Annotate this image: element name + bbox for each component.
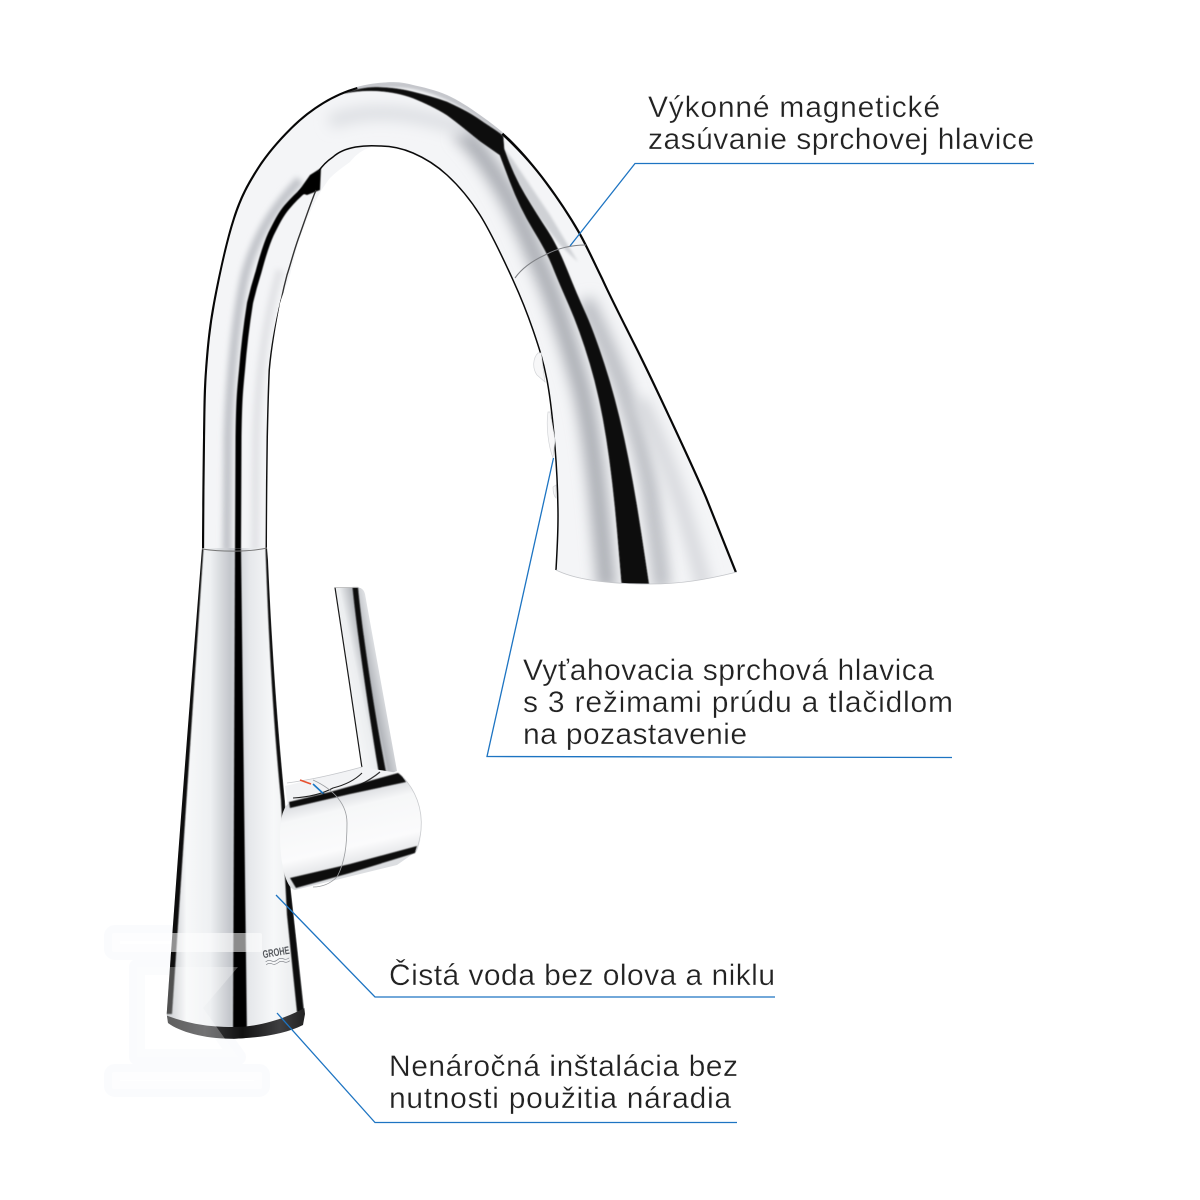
right dark edge: [266, 548, 304, 1012]
callout text: Nenáročná inštalácia bez: [389, 1050, 738, 1083]
sliver next to the black stripe: [503, 148, 578, 262]
watermark: [112, 933, 262, 1089]
head bottom edge: [556, 570, 737, 584]
callout text: zasúvanie sprchovej hlavice: [648, 123, 1034, 156]
callout text: nutnosti použitia náradia: [389, 1082, 731, 1115]
grey lip at top: [345, 84, 503, 134]
logo: GROHE: GROHE: [262, 945, 291, 961]
handle base plate: [285, 767, 398, 808]
callout: magnetic docking: [570, 91, 1034, 246]
black reflection band on the tube: [238, 190, 304, 552]
outer edge: [202, 87, 357, 552]
callout: clean water: [276, 895, 775, 997]
leader line: [570, 164, 1034, 246]
faucet: [160, 82, 737, 1045]
black base ring: [166, 1008, 305, 1039]
black top band and head stripe: [345, 87, 649, 586]
left dark edge: [165, 548, 204, 1014]
thin inner dark line of the tube: [277, 190, 316, 325]
blue temperature mark: [313, 784, 327, 797]
spray buttons: [534, 353, 556, 498]
leader line: [277, 1013, 737, 1122]
watermark halo: [112, 933, 262, 1089]
center black stripe: [233, 548, 247, 1040]
red temperature mark: [300, 780, 311, 784]
mixer cylinder: [280, 773, 422, 890]
seam: [202, 548, 267, 551]
soft shading: [227, 180, 300, 552]
logo: GROHE: [262, 945, 291, 966]
callout text: na pozastavenie: [523, 718, 747, 751]
lower dark edge: [290, 846, 417, 888]
lower body: [160, 548, 310, 1045]
callout text: Výkonné magnetické: [648, 91, 940, 124]
handle: [335, 588, 397, 776]
callout text: Vyťahovacia sprchová hlavica: [523, 654, 934, 687]
callout text: [389, 1050, 738, 1115]
callout text: s 3 režimami prúdu a tlačidlom: [523, 686, 953, 719]
seam: [313, 780, 347, 887]
leader line: [276, 895, 775, 997]
callout text: [648, 91, 1034, 156]
upper dark edge: [289, 773, 406, 808]
dark patch in the bend: [298, 168, 321, 195]
inner edge line: [318, 146, 558, 570]
head seam: [515, 245, 586, 278]
right edge of riser: [267, 300, 282, 552]
callout text: [523, 654, 953, 751]
leader line: [487, 458, 952, 758]
callout: easy installation: [277, 1013, 738, 1122]
faucet spout and pull-out head: [202, 82, 737, 590]
callout text: Čistá voda bez olova a niklu: [389, 958, 775, 992]
callout: pull-out spray head: [487, 458, 953, 758]
